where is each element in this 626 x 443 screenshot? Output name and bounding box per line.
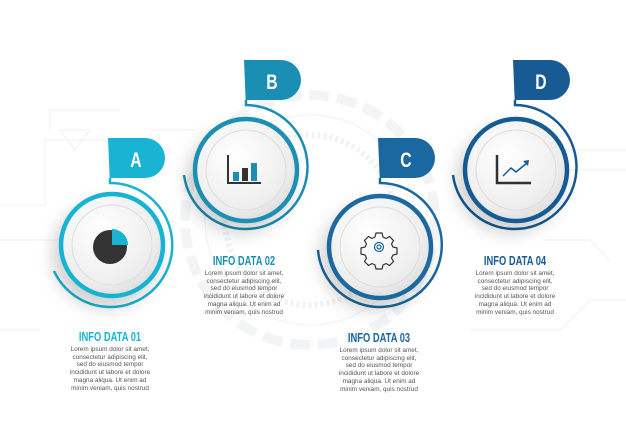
text: info 04: minim veniam, quis nostrud xyxy=(476,309,554,316)
text: info 04: consectetur adipiscing elit, xyxy=(478,278,552,285)
text: info 01: consectetur adipiscing elit, xyxy=(73,354,147,361)
text: info 02: consectetur adipiscing elit, xyxy=(207,278,281,285)
text: info 04: INFO DATA 04 xyxy=(484,253,546,268)
text: info 03: INFO DATA 03 xyxy=(348,330,410,345)
step B xyxy=(184,60,307,229)
icon: pie chart xyxy=(93,229,128,264)
step C: C xyxy=(400,148,412,172)
text: info 04: Lorem ipsum dolor sit amet, xyxy=(476,270,554,277)
step A xyxy=(54,138,172,307)
icon: trend chart xyxy=(497,155,531,183)
text: info 04: incididunt ut labore et dolore xyxy=(475,293,555,300)
text: info 01: INFO DATA 01 xyxy=(79,329,141,344)
text: info 03: sed do eiusmod tempor xyxy=(346,362,412,369)
text: info 03: magna aliqua. Ut enim ad xyxy=(343,378,415,385)
text: info 04: magna aliqua. Ut enim ad xyxy=(479,301,551,308)
step B: B xyxy=(266,70,278,94)
text: info 02 xyxy=(204,253,284,316)
text: info 02: magna aliqua. Ut enim ad xyxy=(208,301,280,308)
text: info 04: sed do eiusmod tempor xyxy=(482,285,548,292)
icon: gear xyxy=(361,233,397,269)
text: info 01: incididunt ut labore et dolore xyxy=(70,369,150,376)
text: info 04 xyxy=(475,253,555,316)
step C xyxy=(318,138,442,307)
text: info 03: consectetur adipiscing elit, xyxy=(342,355,416,362)
text: info 01: minim veniam, quis nostrud xyxy=(71,385,149,392)
text: info 02: sed do eiusmod tempor xyxy=(211,285,277,292)
text: info 02: Lorem ipsum dolor sit amet, xyxy=(205,270,283,277)
text: info 03: Lorem ipsum dolor sit amet, xyxy=(340,347,418,354)
step D xyxy=(453,60,576,229)
text: info 02: incididunt ut labore et dolore xyxy=(204,293,284,300)
text: info 03 xyxy=(339,330,419,393)
text: info 01: sed do eiusmod tempor xyxy=(77,361,143,368)
text: info 03: incididunt ut labore et dolore xyxy=(339,370,419,377)
text: info 01 xyxy=(70,329,150,392)
icon: bar chart xyxy=(228,155,261,183)
step D: D xyxy=(535,70,547,94)
text: info 03: minim veniam, quis nostrud xyxy=(340,386,418,393)
text: info 01: Lorem ipsum dolor sit amet, xyxy=(71,346,149,353)
text: info 01: magna aliqua. Ut enim ad xyxy=(74,377,146,384)
step A: A xyxy=(130,148,142,172)
text: info 02: INFO DATA 02 xyxy=(213,253,275,268)
text: info 02: minim veniam, quis nostrud xyxy=(205,309,283,316)
